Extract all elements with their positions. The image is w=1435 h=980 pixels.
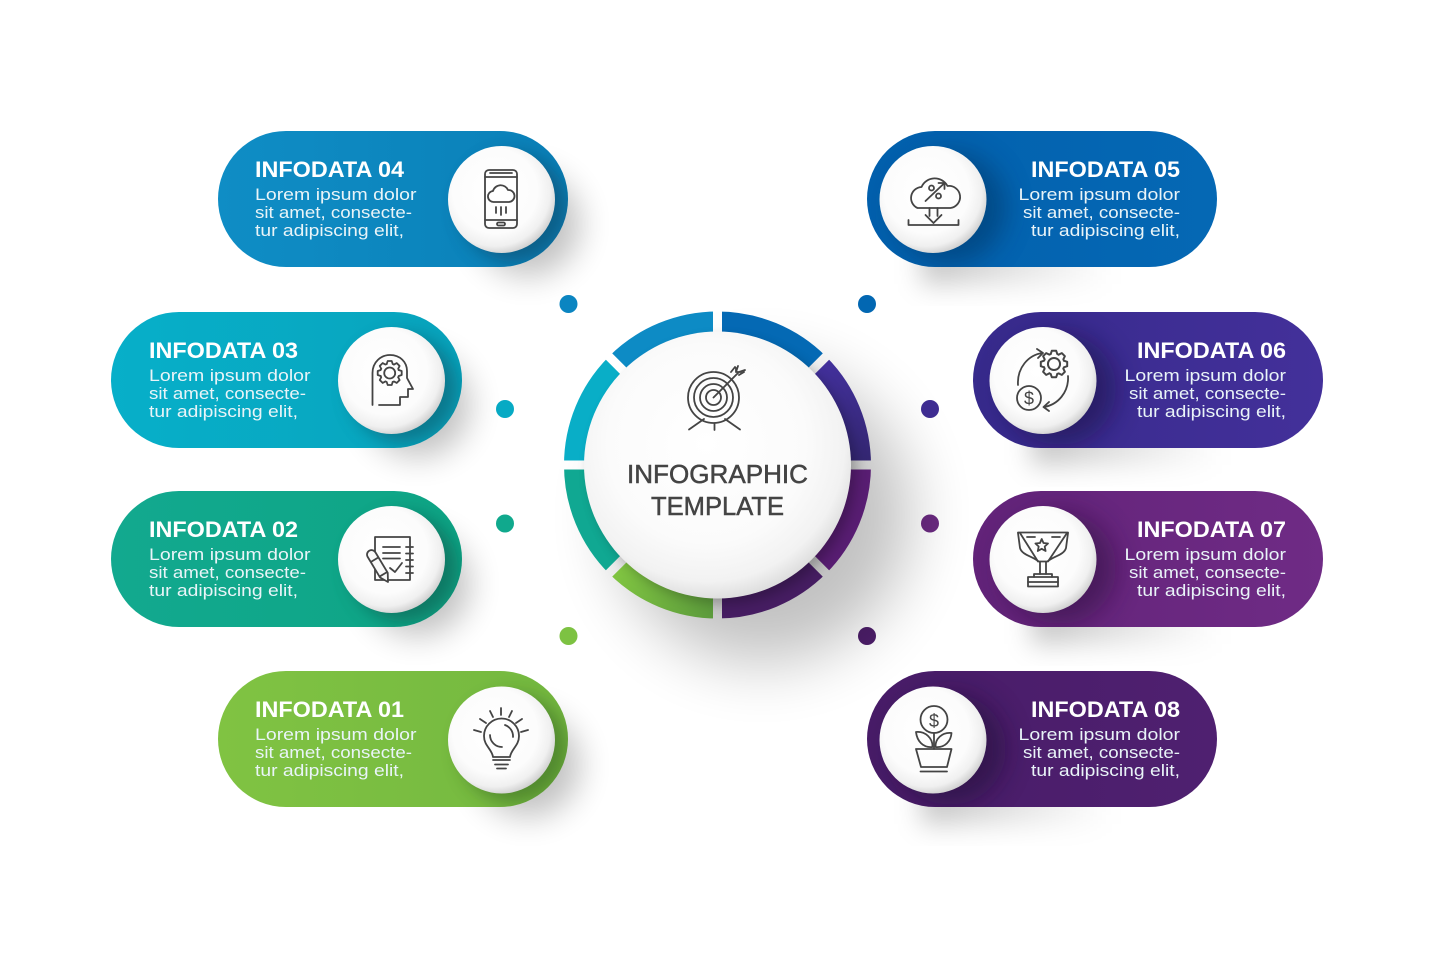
icon: notepad and pen <box>365 537 413 584</box>
button shadow <box>350 514 458 622</box>
body text: Lorem ipsum dolor <box>255 185 417 204</box>
heading: INFODATA 03 <box>149 338 298 363</box>
panel: infodata 06 <box>973 312 1323 465</box>
body text: Lorem ipsum dolor <box>1124 545 1286 564</box>
icon: target with arrow <box>688 366 745 430</box>
pill shadow <box>1032 421 1222 465</box>
pill shadow <box>476 713 580 817</box>
heading: infographic template: INFOGRAPHIC <box>627 459 808 489</box>
heading: INFODATA 01 <box>255 697 404 722</box>
body text: sit amet, consecte- <box>1129 384 1286 403</box>
body text: tur adipiscing elit, <box>255 221 404 240</box>
panel: infodata 01 <box>218 671 580 817</box>
button shadow <box>460 154 568 262</box>
button <box>990 506 1096 613</box>
body text <box>255 725 417 780</box>
body text: sit amet, consecte- <box>255 743 412 762</box>
body text: tur adipiscing elit, <box>1137 402 1286 421</box>
button shadow <box>894 693 1006 805</box>
icon: money plant: $ <box>929 711 939 731</box>
button <box>990 327 1096 434</box>
body text: tur adipiscing elit, <box>1031 221 1180 240</box>
heading: INFODATA 02 <box>149 517 298 542</box>
button <box>338 506 445 613</box>
body text <box>255 185 417 240</box>
icon: head with gear <box>372 355 413 405</box>
pill shadow <box>366 353 470 457</box>
panel: central hub <box>575 322 910 663</box>
heading: infographic template: TEMPLATE <box>651 491 784 521</box>
pill shadow <box>366 532 470 636</box>
panel: infodata 02 <box>111 491 470 636</box>
body text: tur adipiscing elit, <box>149 402 298 421</box>
body text: tur adipiscing elit, <box>149 581 298 600</box>
icon: gear and dollar cycle: $ <box>1024 388 1034 408</box>
button shadow <box>460 695 568 803</box>
body text: sit amet, consecte- <box>255 203 412 222</box>
body text: Lorem ipsum dolor <box>1018 725 1180 744</box>
icon: smartphone with cloud <box>485 170 517 228</box>
pill shadow <box>922 780 1112 824</box>
pill shadow <box>1032 600 1222 644</box>
panel: infodata 03 <box>111 312 470 457</box>
body text: Lorem ipsum dolor <box>1124 366 1286 385</box>
pill <box>111 312 462 448</box>
heading: INFODATA 04 <box>255 157 405 182</box>
body text <box>1018 725 1180 780</box>
body text <box>1124 366 1286 421</box>
panel: infodata 04 <box>218 131 580 276</box>
heading: INFODATA 07 <box>1137 517 1286 542</box>
button <box>448 146 555 253</box>
body text <box>149 366 311 421</box>
body text: tur adipiscing elit, <box>1137 581 1286 600</box>
connector dots <box>496 295 939 645</box>
heading: INFODATA 08 <box>1031 697 1180 722</box>
button shadow <box>1004 512 1116 624</box>
panel: infodata 08 <box>867 671 1217 824</box>
body text: sit amet, consecte- <box>149 563 306 582</box>
body text: sit amet, consecte- <box>149 384 306 403</box>
pill <box>218 131 568 267</box>
pill <box>973 491 1323 627</box>
body text: Lorem ipsum dolor <box>255 725 417 744</box>
icon: trophy <box>1018 532 1068 586</box>
pill shadow <box>922 240 1112 284</box>
body text: Lorem ipsum dolor <box>149 366 311 385</box>
icon: cloud with percent and download <box>908 178 960 225</box>
centre disc <box>584 332 851 598</box>
segmented ring <box>575 322 860 608</box>
body text: sit amet, consecte- <box>1023 743 1180 762</box>
body text: tur adipiscing elit, <box>255 761 404 780</box>
heading: infographic template <box>627 459 808 521</box>
button shadow <box>894 152 1006 264</box>
icon: light bulb <box>474 708 528 768</box>
body text <box>1018 185 1180 240</box>
icon: money plant <box>916 706 952 772</box>
button <box>338 327 445 434</box>
pill <box>111 491 462 627</box>
body text: Lorem ipsum dolor <box>149 545 311 564</box>
heading: INFODATA 06 <box>1137 338 1286 363</box>
hub drop shadow <box>614 367 910 663</box>
heading: INFODATA 05 <box>1031 157 1180 182</box>
panel: infodata 05 <box>867 131 1217 284</box>
button <box>880 146 986 253</box>
pill <box>867 671 1217 807</box>
body text <box>149 545 311 600</box>
body text <box>1124 545 1286 600</box>
icon: gear and dollar cycle <box>1017 349 1068 411</box>
pill shadow <box>476 172 580 276</box>
body text: tur adipiscing elit, <box>1031 761 1180 780</box>
pill <box>218 671 568 807</box>
disc shadow on ring <box>590 338 856 604</box>
button shadow <box>1004 333 1116 445</box>
button <box>448 686 555 794</box>
body text: sit amet, consecte- <box>1129 563 1286 582</box>
panel: infodata 07 <box>973 491 1323 644</box>
button shadow <box>350 335 458 443</box>
body text: Lorem ipsum dolor <box>1018 185 1180 204</box>
pill <box>867 131 1217 267</box>
button <box>880 686 986 794</box>
body text: sit amet, consecte- <box>1023 203 1180 222</box>
pill <box>973 312 1323 448</box>
